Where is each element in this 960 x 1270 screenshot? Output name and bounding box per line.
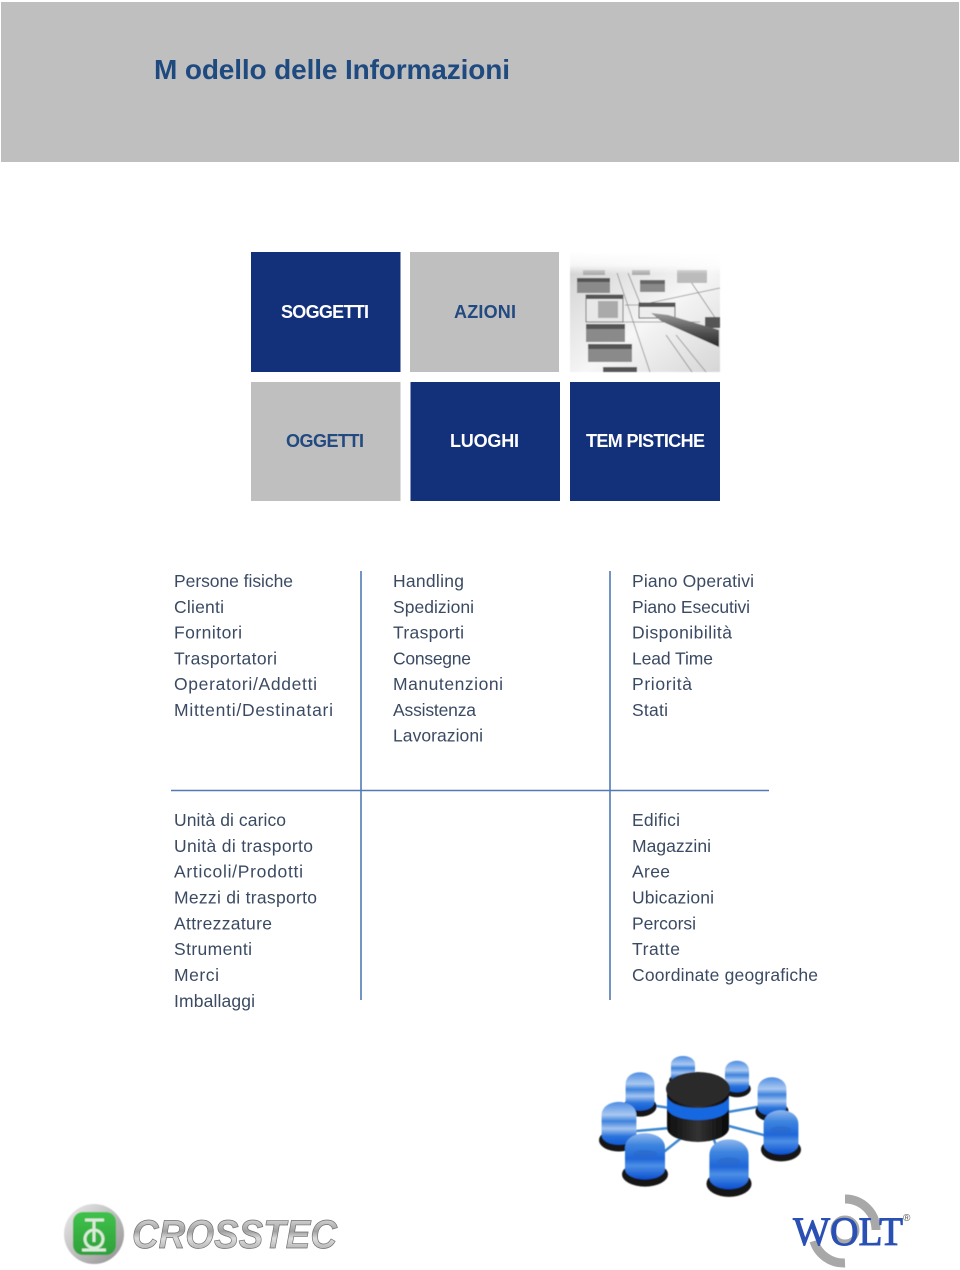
list: oggetti: Mezzi di trasporto <box>174 888 317 908</box>
list: oggetti: Strumenti <box>174 939 252 959</box>
tile: tempistiche <box>570 382 720 501</box>
list: soggetti: Clienti <box>174 597 224 617</box>
tile: soggetti <box>251 252 400 372</box>
list: oggetti: Merci <box>174 965 219 985</box>
list: azioni: Manutenzioni <box>393 674 503 694</box>
list: azioni: Handling <box>393 571 464 591</box>
crosstec wordmark: CROSSTEC <box>132 1213 338 1257</box>
wolt wordmark: WOLT <box>793 1209 903 1254</box>
list: oggetti: Articoli/Prodotti <box>174 862 303 882</box>
tile: luoghi <box>410 382 560 501</box>
list: luoghi: Aree <box>632 862 670 882</box>
registered mark: ® <box>903 1213 911 1224</box>
list: azioni: Spedizioni <box>393 597 474 617</box>
list: soggetti: Fornitori <box>174 622 242 642</box>
list: azioni: Lavorazioni <box>393 726 483 746</box>
list: luoghi: Edifici <box>632 810 680 830</box>
list: azioni: Trasporti <box>393 622 464 642</box>
tile: azioni <box>410 252 559 372</box>
tile: luoghi: LUOGHI <box>450 431 519 451</box>
list: oggetti: Attrezzature <box>174 914 272 934</box>
list: luoghi: Tratte <box>632 939 680 959</box>
list: oggetti: Unità di trasporto <box>174 836 313 856</box>
list: azioni: Consegne <box>393 648 471 668</box>
list: azioni <box>393 571 503 746</box>
list: soggetti: Persone fisiche <box>174 571 293 591</box>
list: soggetti <box>174 571 333 720</box>
list: tempistiche: Priorità <box>632 674 692 694</box>
list: luoghi: Percorsi <box>632 914 696 934</box>
list: soggetti: Mittenti/Destinatari <box>174 700 333 720</box>
list: tempistiche: Disponibilità <box>632 622 732 642</box>
tile: oggetti: OGGETTI <box>286 431 364 451</box>
list: tempistiche: Stati <box>632 700 668 720</box>
list: luoghi: Ubicazioni <box>632 888 714 908</box>
tile: oggetti <box>251 382 400 501</box>
list: tempistiche: Lead Time <box>632 648 713 668</box>
wolt swirl arcs <box>814 1199 876 1263</box>
tile: azioni: AZIONI <box>454 302 516 322</box>
list: tempistiche: Piano Operativi <box>632 571 754 591</box>
image tile: diagram photo with pen <box>570 252 720 372</box>
list: soggetti: Operatori/Addetti <box>174 674 317 694</box>
list: azioni: Assistenza <box>393 700 476 720</box>
tile: soggetti: SOGGETTI <box>281 302 369 322</box>
list: oggetti <box>174 810 317 1011</box>
list: luoghi: Magazzini <box>632 836 711 856</box>
crosstec emblem <box>64 1204 124 1264</box>
list: luoghi <box>632 810 818 985</box>
list: oggetti: Imballaggi <box>174 991 255 1011</box>
logo: crosstec <box>64 1204 338 1264</box>
list: tempistiche: Piano Esecutivi <box>632 597 750 617</box>
icon: database network <box>599 1056 801 1197</box>
list: soggetti: Trasportatori <box>174 648 277 668</box>
header band <box>1 2 959 162</box>
tile: tempistiche: TEM PISTICHE <box>586 431 705 451</box>
title: M odello delle Informazioni <box>154 54 510 85</box>
list: luoghi: Coordinate geografiche <box>632 965 818 985</box>
category tile grid <box>251 252 720 501</box>
list: tempistiche <box>632 571 754 720</box>
list: oggetti: Unità di carico <box>174 810 286 830</box>
logo: wolt <box>793 1199 911 1263</box>
